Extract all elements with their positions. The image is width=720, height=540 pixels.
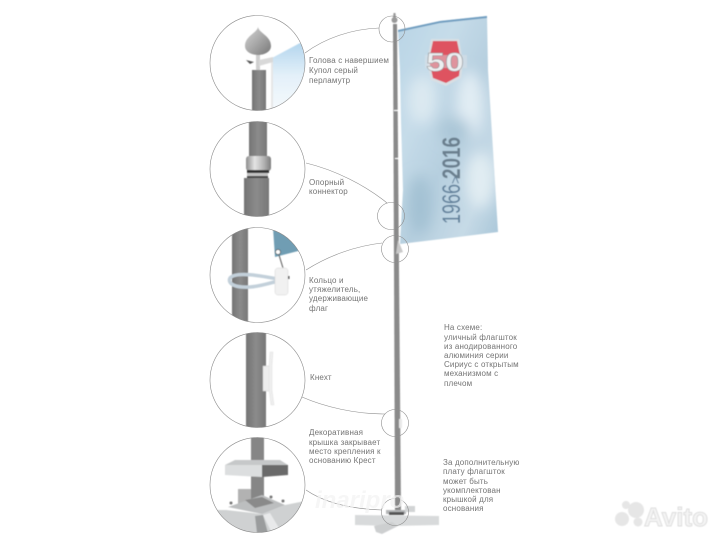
- text block: additional plate: может быть: [443, 477, 488, 486]
- text block: additional plate: крышкой для: [443, 495, 493, 504]
- leader: ring: [306, 243, 382, 270]
- detail circle: decorative cap and base: [210, 437, 306, 533]
- label: decorative cap: крышка закрывает: [309, 438, 380, 447]
- marker circle: head: [379, 16, 405, 42]
- watermark: inaripro: inaripro: [315, 487, 404, 514]
- text block: scheme description: уличный флагшток: [444, 333, 517, 342]
- marker circle: connector: [378, 202, 404, 230]
- label: ring and weight: утяжелитель,: [309, 285, 360, 294]
- label: head: Голова с навершием: [309, 56, 389, 65]
- text block: scheme description: [444, 323, 519, 388]
- label: ring and weight: [309, 276, 369, 313]
- text block: scheme description: алюминия серии: [444, 351, 509, 360]
- flag text: years: [438, 137, 466, 224]
- text block: scheme description: плечом: [444, 379, 472, 388]
- label: ring and weight: флаг: [309, 304, 328, 313]
- label: decorative cap: Декоративная: [309, 428, 363, 437]
- label: ring and weight: Кольцо и: [309, 276, 344, 285]
- text block: scheme description: На схеме:: [444, 323, 482, 332]
- flag emblem: 50: [425, 39, 467, 86]
- leader: connector: [306, 163, 387, 203]
- label: pearl: перламутр: [309, 76, 351, 85]
- detail circle: ring and weight: [210, 225, 305, 325]
- label: connector: Опорный: [309, 178, 344, 187]
- leader: cleat: [302, 397, 385, 414]
- text block: additional plate: основания: [443, 504, 484, 513]
- small circles and leader lines: [302, 16, 408, 526]
- flagpole: [392, 13, 403, 512]
- flag: [398, 16, 498, 244]
- flag text: years: 1966: [438, 184, 466, 224]
- text block: additional plate: За дополнительную: [443, 458, 520, 467]
- detail circle: support connector: [210, 120, 305, 218]
- flag emblem: 50: 50: [426, 47, 464, 77]
- text block: scheme description: Сириус с открытым: [444, 360, 519, 369]
- label: connector line 2: коннектор: [309, 187, 348, 196]
- base: cross stand: [355, 506, 439, 534]
- watermark: Avito: Avito: [644, 502, 708, 532]
- marker circle: base: [382, 498, 408, 526]
- text block: scheme description: механизмом с: [444, 369, 498, 378]
- text block: additional plate: укомплектован: [443, 486, 501, 495]
- text block: additional plate: [443, 458, 520, 513]
- flag text: years: >: [447, 176, 463, 184]
- detail circle: cleat: [210, 330, 305, 430]
- flag highlights: [408, 71, 494, 235]
- marker circle: cleat: [382, 410, 408, 436]
- label: dome: Купол серый: [309, 66, 358, 75]
- detail circle: head with finial: [210, 16, 310, 115]
- text block: additional plate: плату флагшток: [443, 467, 505, 476]
- text block: scheme description: из анодированного: [444, 342, 518, 351]
- marker circle: ring: [382, 236, 408, 262]
- label: ring and weight: удерживающие: [309, 294, 369, 303]
- label: decorative cap: [309, 428, 381, 465]
- leader: head: [305, 28, 379, 53]
- label: cleat: Кнехт: [310, 373, 332, 382]
- label: decorative cap: основанию Крест: [309, 456, 376, 465]
- label: decorative cap: место крепления к: [309, 447, 381, 456]
- watermark: Avito: [615, 501, 708, 532]
- leader: cap: [306, 490, 382, 510]
- flag text: years: 2016: [438, 137, 466, 179]
